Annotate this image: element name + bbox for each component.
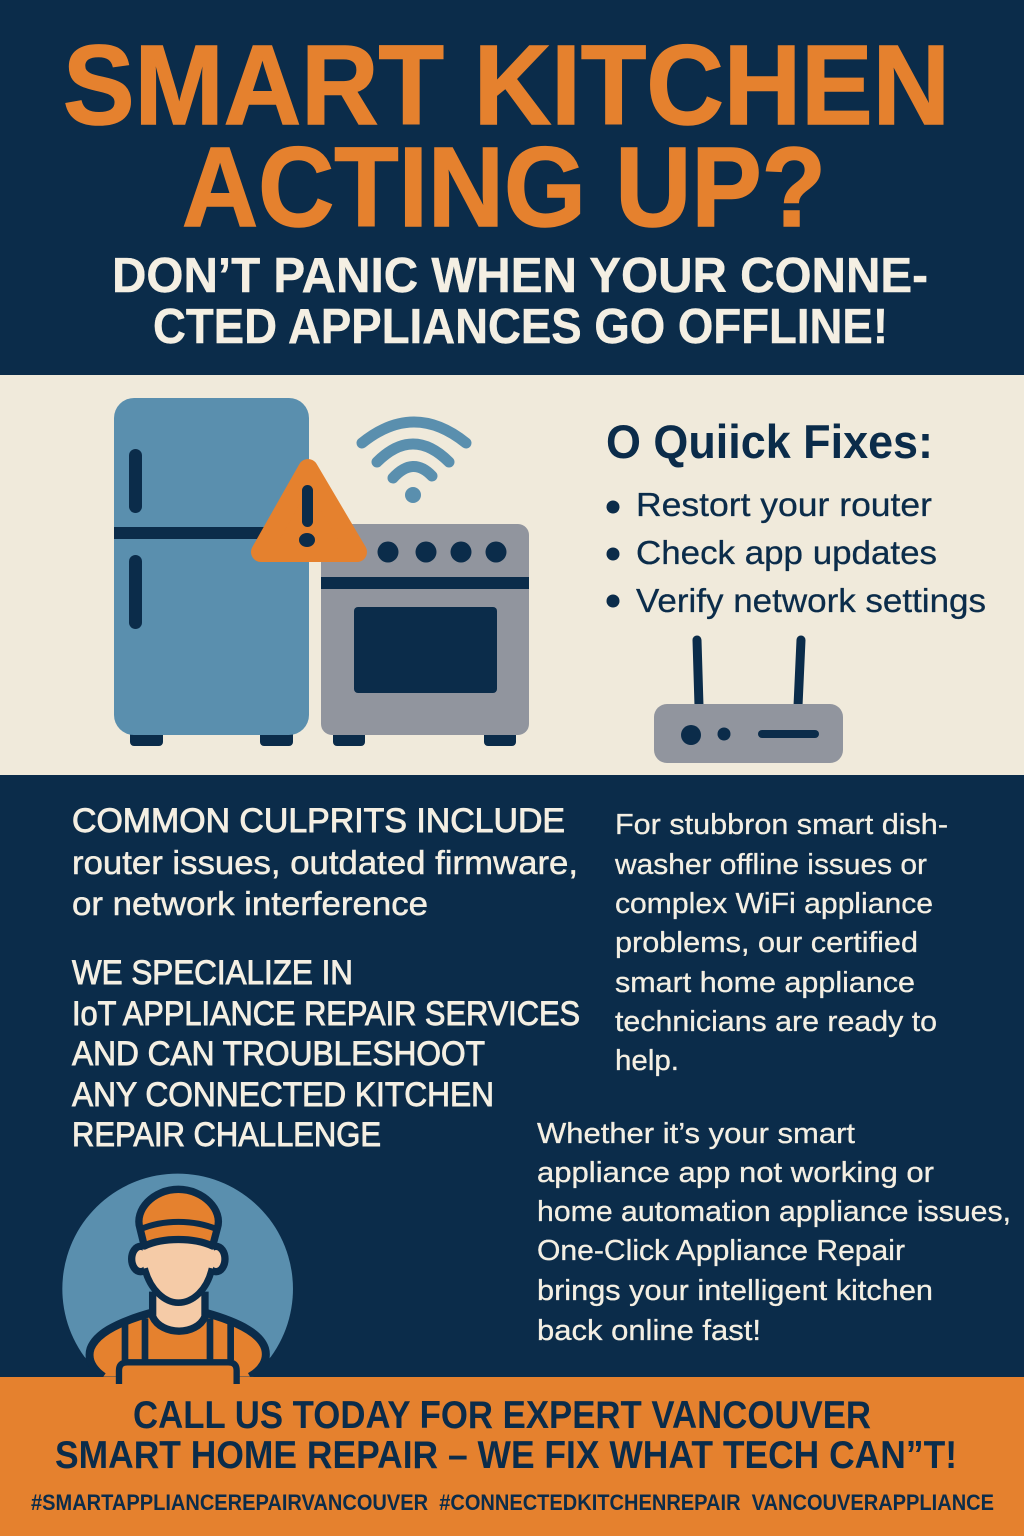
text block: stubborn issues: technicians are ready to [615,1006,937,1038]
text block: we specialize: AND CAN TROUBLESHOOT [72,1035,485,1073]
list: quick fixes: Check app updates [636,534,937,571]
panel: quick fixes band [0,375,1024,775]
text block: stubborn issues: complex WiFi appliance [615,888,933,920]
icon: wifi signal [362,422,466,503]
list: quick fixes: Restort your router [636,486,932,523]
text block: stubborn issues: smart home appliance [615,967,915,999]
subtitle: CTED APPLIANCES GO OFFLINE! [153,300,888,354]
text block: one-click appliance repair: back online fast! [537,1315,761,1347]
list: quick fixes [606,486,986,619]
text block: stubborn issues: problems, our certified [615,927,918,959]
text block: one-click appliance repair [537,1118,1011,1347]
text block: one-click appliance repair: brings your intelligent kitchen [537,1275,933,1307]
text block: we specialize: ANY CONNECTED KITCHEN [72,1076,494,1114]
text block: common culprits [72,802,578,922]
title: ACTING UP? [182,124,826,250]
icon: technician [62,1174,293,1384]
text block: one-click appliance repair: Whether it’s your smart [537,1118,855,1150]
text block: stubborn issues: washer offline issues or [614,849,927,881]
icon: refrigerator [114,398,309,746]
title [63,22,950,250]
subtitle [112,249,928,354]
subtitle: DON’T PANIC WHEN YOUR CONNE- [112,249,928,303]
icon: warning triangle [261,469,357,552]
text block: we specialize: REPAIR CHALLENGE [72,1116,381,1154]
list: quick fixes: Verify network settings [636,582,986,619]
text block: stubborn issues: For stubbron smart dish- [615,809,948,841]
call to action text: CALL US TODAY FOR EXPERT VANCOUVER [133,1394,871,1437]
text block: common culprits: COMMON CULPRITS INCLUDE [72,802,565,840]
call to action text: SMART HOME REPAIR – WE FIX WHAT TECH CAN”T! [55,1434,957,1477]
text block: stubborn issues [614,809,948,1077]
panel: call to action footer [0,1377,1024,1536]
text block: we specialize: IoT APPLIANCE REPAIR SERVICES [72,995,580,1033]
icon: stove [321,524,529,746]
text block: common culprits: or network interference [72,885,428,922]
text block: stubborn issues: help. [615,1045,679,1077]
text block: one-click appliance repair: home automation appliance issues, [537,1196,1011,1228]
text block: we specialize [72,954,580,1154]
icon: router [654,640,843,763]
text block: we specialize: WE SPECIALIZE IN [72,954,353,992]
text block: one-click appliance repair: appliance app not working or [537,1157,934,1189]
heading: quick fixes: O Quiick Fixes: [606,415,933,468]
call to action text [55,1394,957,1477]
text block: one-click appliance repair: One-Click Appliance Repair [537,1235,905,1267]
text block: common culprits: router issues, outdated firmware, [72,844,578,881]
title: SMART KITCHEN [63,22,950,148]
